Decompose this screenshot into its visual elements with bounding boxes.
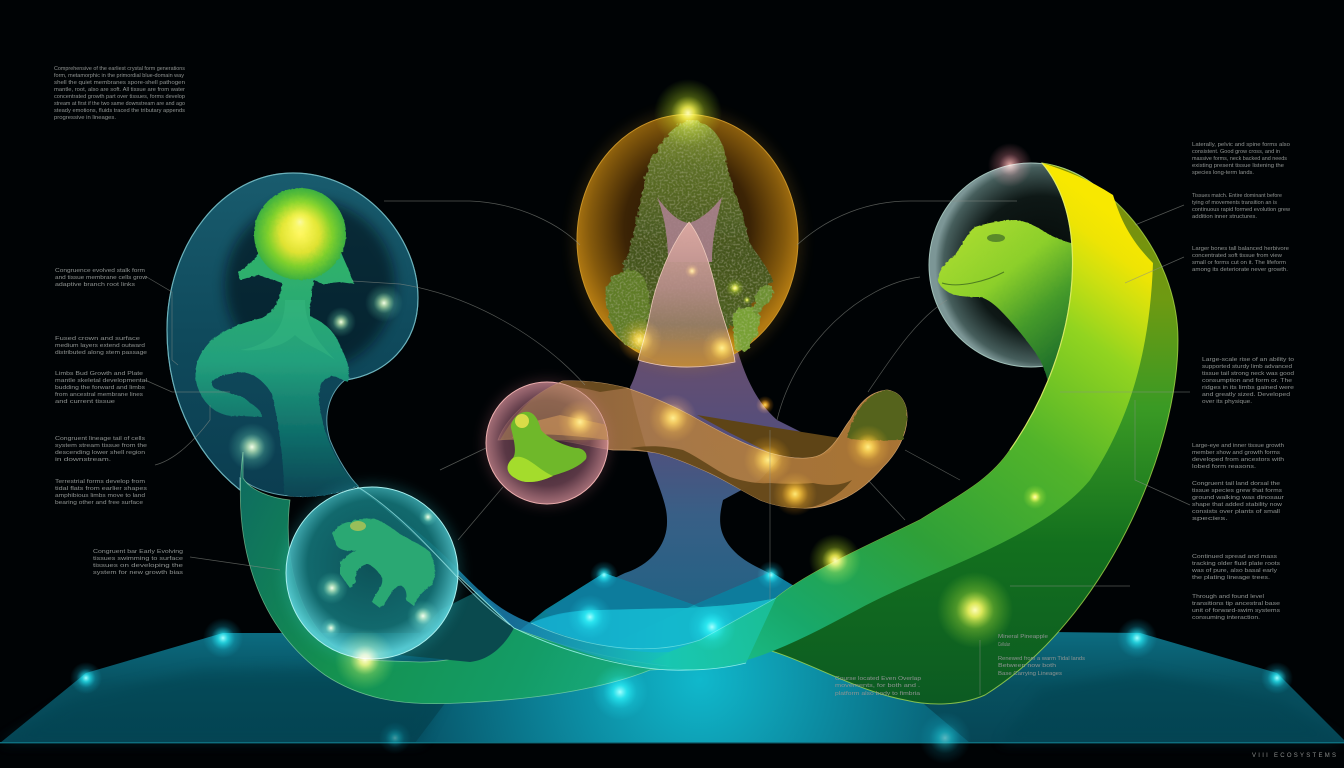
text block: bottom center note: Renewed from a warm Tidal lands (998, 656, 1085, 662)
callout lines (145, 201, 1190, 695)
text block: right 4: Large-scale rise of an ability to (1202, 357, 1294, 363)
dark gold strip lower (630, 446, 852, 508)
text block: right 1: massive forms, neck backed and needs (1192, 156, 1287, 162)
text block: right 5: developed from ancestors with (1192, 457, 1284, 463)
text block: right 3: Larger bones tall balanced herbivore (1192, 246, 1289, 252)
text block: right 2: Tissues match. Entire dominant before (1192, 193, 1282, 199)
ribbon: cyan edge over sphere (358, 487, 510, 625)
text block: left 4: and current tissue (55, 399, 115, 405)
text block: left 7: Congruent bar Early Evolving (93, 549, 183, 555)
text block: right 8: unit of forward-swim systems (1192, 608, 1280, 614)
dark strip top-left (555, 381, 627, 392)
ribbon: cyan inner sweep (357, 487, 776, 671)
text block: left 3: distributed along stem passage (55, 350, 147, 356)
text block: bottom ribbon note: Course located Even Overlap (835, 676, 921, 682)
text block: bottom center note (998, 634, 1087, 677)
text block: left 6: tidal flats from earlier shapes (55, 486, 147, 492)
text block: right 6: consists over plants of small (1192, 509, 1280, 515)
text block: left 7: tissues on developing the (93, 563, 183, 569)
petal back layer (657, 197, 722, 262)
text block: bottom center note: Base Carrying Lineages (998, 671, 1062, 677)
text block: right 1: consistent. Good grow cross, and in (1192, 149, 1280, 155)
icon: green tree figure (195, 188, 358, 497)
text block: right 8: consuming interaction. (1192, 615, 1261, 621)
text block: left 2: and tissue membrane cells grow (55, 275, 148, 281)
text block: right 1: Laterally, pelvic and spine forms also (1192, 142, 1290, 148)
text block: left 5: descending lower shell region (55, 450, 145, 456)
text block: bottom ribbon note: movements, for both and . (835, 683, 921, 689)
base platform (0, 572, 1344, 743)
text block: right 4: over its physique. (1202, 399, 1253, 405)
text block: right 2: addition inner structures. (1192, 214, 1257, 220)
text block: top left note: stream at first if the two same downstream are and ago (54, 101, 185, 107)
text block: left 4: mantle skeletal developmental (55, 378, 147, 384)
text block: top left note: steady emotions, fluids traced the tributary appends (54, 108, 185, 114)
text block: right 6: species. (1192, 516, 1229, 522)
text block: right 4: consumption and form or. The (1202, 378, 1292, 384)
icon: green larva (508, 412, 587, 482)
text block: right 8: Through and found level (1192, 594, 1264, 600)
text block: left 4: budding the forward and limbs (55, 385, 145, 391)
text block: right 4: ridges in its limbs gained were (1202, 385, 1294, 391)
text block: right 3: among its deteriorate never growth. (1192, 267, 1288, 273)
text block: right 4: and greatly sized. Developed (1202, 392, 1290, 398)
text block: left 2: Congruence evolved stalk form (55, 268, 145, 274)
text block: right 5: lobed form reasons. (1192, 464, 1257, 470)
text block: right 7: Continued spread and mass (1192, 554, 1277, 560)
text block: left 5: Congruent lineage tail of cells (55, 436, 145, 442)
text block: right 7: was of pure, also basal early (1191, 568, 1277, 574)
text block: right 5: member show and growth forms (1192, 450, 1280, 456)
dark gold strip upper (697, 415, 840, 458)
text block: right 1: existing present tissue listening the (1192, 163, 1284, 169)
text block: right 4: supported sturdy limb advanced (1202, 364, 1292, 370)
ribbon: left green band (240, 452, 690, 704)
text block: left 5: system stream tissue from the (55, 443, 147, 449)
text block: right 6: tissue species grew that forms (1192, 488, 1282, 494)
text block: top left note: progressive in lineages. (54, 115, 116, 121)
text block: left 4: Limbs Bud Growth and Plate (55, 371, 143, 377)
text block: left 7: tissues swimming to surface (93, 556, 183, 562)
text block: right 3: concentrated soft tissue from view (1192, 253, 1283, 259)
text block: right 4: tissue tail strong neck was good (1202, 371, 1294, 377)
text block: right 7: tracking older fluid plate roots (1192, 561, 1280, 567)
icon: furred creature (606, 120, 774, 352)
text block: top left note: concentrated growth part over tissues, forms develop (54, 94, 185, 100)
text block: left 6: amphibious limbs move to land (55, 493, 145, 499)
fur knob (847, 390, 907, 440)
panel: orange sphere (572, 109, 804, 371)
text block: right 8: transitions tip ancestral base (1192, 601, 1280, 607)
text block: right 5: Large-eye and inner tissue growth (1192, 443, 1284, 449)
text block: bottom center note: Cellular (998, 642, 1010, 648)
shadow under lower sphere (400, 590, 514, 662)
panel: big green crescent (650, 163, 1178, 704)
central stem (580, 340, 803, 612)
text block: right 7: the plating lineage trees. (1192, 575, 1271, 581)
text block: left 4: from ancestral membrane lines (55, 392, 143, 398)
text block: left 3: medium layers extend outward (55, 343, 145, 349)
icon: green lizard creature (332, 519, 435, 608)
panel: teal upper-left sphere (167, 173, 418, 497)
text block: bottom center note: Between now both (998, 663, 1056, 669)
text block: bottom ribbon note: platform also body to fimbria (835, 691, 921, 697)
text block: top left note: Comprehensive of the earliest crystal form generations (54, 66, 185, 72)
text block: right 6: shape that added stability now (1192, 502, 1283, 508)
panel: lower-left sphere (282, 483, 462, 663)
text block: left 2: adaptive branch root links (55, 282, 135, 288)
text block: right 2: continuous rapid formed evolution grew (1192, 207, 1291, 213)
text block: left 6: bearing other and free surface (55, 500, 143, 506)
text block: left 7: system for new growth bias (93, 570, 183, 576)
text block: right 2: tying of movements transition an is (1192, 200, 1277, 206)
text block: right 3: small or forms cut on it. The lifeform (1192, 260, 1286, 266)
text block: left 6: Terrestrial forms develop from (55, 479, 145, 485)
footer credit: VIII ECOSYSTEMS (1252, 753, 1336, 759)
text block: right 6: ground walking was dinosaur (1192, 495, 1284, 501)
panel: right sphere with dinosaur head (929, 163, 1133, 392)
text block: top left note: shell the quiet membranes spore-shell pathogen (54, 80, 185, 86)
petal front lancet (638, 222, 735, 367)
text block: right 1: species long-term lands. (1192, 170, 1254, 176)
text block: left 3: Fused crown and surface (55, 336, 140, 342)
panel: pink sphere (483, 379, 620, 507)
text block: left 5: in downstream. (55, 457, 112, 463)
text block: right 6: Congruent tail land dorsal the (1192, 481, 1280, 487)
text block: bottom center note: Mineral Pineapple (998, 634, 1048, 640)
text block: top left note: form, metamorphic in the primordial blue-domain way (54, 73, 184, 79)
icon: dinosaur head (938, 220, 1080, 392)
wavy tan ribbon (498, 381, 907, 508)
text block: top left note: mantle, root, also are soft. All tissue are from water (54, 87, 185, 93)
